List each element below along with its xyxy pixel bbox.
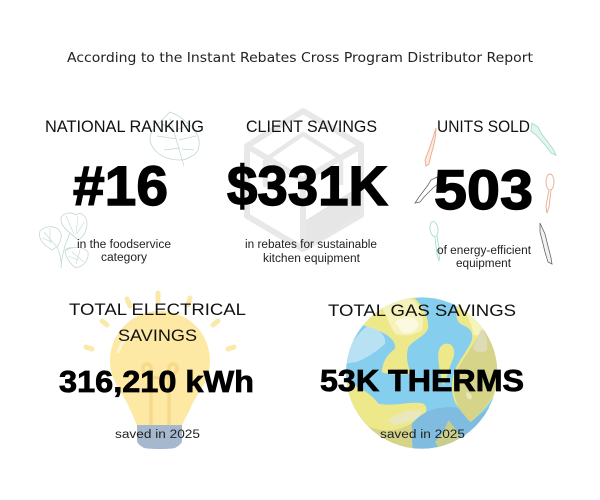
icon: globe: [346, 297, 498, 449]
heading: total electrical savings: TOTAL ELECTRICAL: [69, 301, 246, 319]
caption: foodservice: [77, 239, 171, 264]
icon: grey fork: [415, 177, 438, 203]
heading: units sold: UNITS SOLD: [437, 118, 530, 136]
icon: light bulb: [86, 293, 234, 449]
panel: national ranking: [39, 112, 204, 268]
icon: monstera leaf: [150, 112, 199, 166]
caption: saved in 2025: saved in 2025: [380, 429, 465, 441]
caption: energy-efficient: equipment: [456, 258, 512, 270]
title: According to the Instant Rebates Cross Program Distributor Report: [67, 50, 533, 66]
stat: $331K: $331K: [227, 154, 388, 217]
caption: foodservice: in the foodservice: [77, 239, 171, 251]
caption: rebates: kitchen equipment: [263, 253, 361, 265]
panel: client savings: [227, 111, 388, 265]
caption: saved in 2025: saved in 2025: [115, 429, 200, 441]
heading: total electrical savings: [69, 301, 246, 345]
icon: monstera plant: [39, 213, 88, 268]
icon: orange spoon: [546, 174, 554, 213]
icon: teal spoon: [429, 221, 440, 261]
stat: 503: 503: [434, 158, 533, 221]
heading: total gas savings: TOTAL GAS SAVINGS: [328, 302, 516, 320]
heading: national ranking: NATIONAL RANKING: [45, 118, 204, 136]
icon: orange knife: [425, 128, 436, 166]
icon: grey knife: [540, 223, 552, 264]
panel: total electrical savings: [59, 293, 254, 449]
panel: total gas savings: [320, 292, 524, 459]
stat: 53K therms: 53K THERMS: [320, 363, 524, 398]
stat: #16: #16: [73, 154, 168, 217]
stat: 316,210 kWh: 316,210 kWh: [59, 364, 254, 399]
icon: grey box: [247, 111, 361, 249]
caption: energy-efficient: [437, 245, 532, 270]
icon: teal fork: [531, 123, 556, 155]
panel: units sold: [415, 118, 556, 270]
caption: foodservice: category: [101, 252, 147, 264]
heading: total electrical savings: SAVINGS: [118, 327, 197, 345]
caption: rebates: in rebates for sustainable: [245, 239, 377, 251]
heading: client savings: CLIENT SAVINGS: [246, 118, 377, 136]
caption: rebates: [245, 239, 377, 265]
infographic canvas: [39, 52, 557, 449]
caption: energy-efficient: of energy-efficient: [437, 245, 532, 257]
